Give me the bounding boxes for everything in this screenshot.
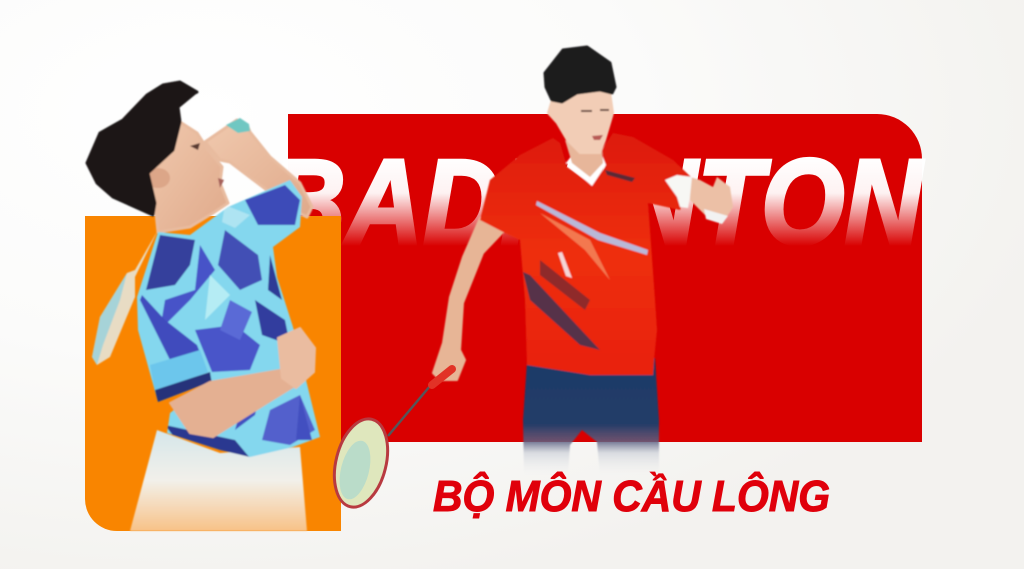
heading: BADMINTON watermark: BADMINTON [268, 134, 925, 270]
subtitle: BỘ MÔN CẦU LÔNG [433, 470, 830, 521]
right player [433, 47, 733, 476]
red panel [288, 114, 922, 442]
right player shorts [523, 358, 659, 476]
right player collar, neck and face [548, 92, 613, 186]
badminton racket [326, 369, 452, 513]
shirt sash stripes [523, 170, 648, 350]
left player shorts [130, 430, 307, 531]
left player [87, 82, 320, 531]
right player left arm [433, 218, 503, 380]
left player forearm and fist [170, 328, 315, 437]
shuttlecock [665, 175, 692, 208]
left player racket [92, 230, 158, 365]
right player hand and wristband [690, 177, 733, 224]
right player red shirt [480, 133, 692, 375]
orange panel [85, 216, 341, 531]
left player raised arm [205, 118, 312, 217]
right player hair [545, 47, 615, 102]
left player hair [87, 82, 197, 215]
left player face [146, 122, 228, 232]
left player patterned shirt [137, 180, 320, 458]
